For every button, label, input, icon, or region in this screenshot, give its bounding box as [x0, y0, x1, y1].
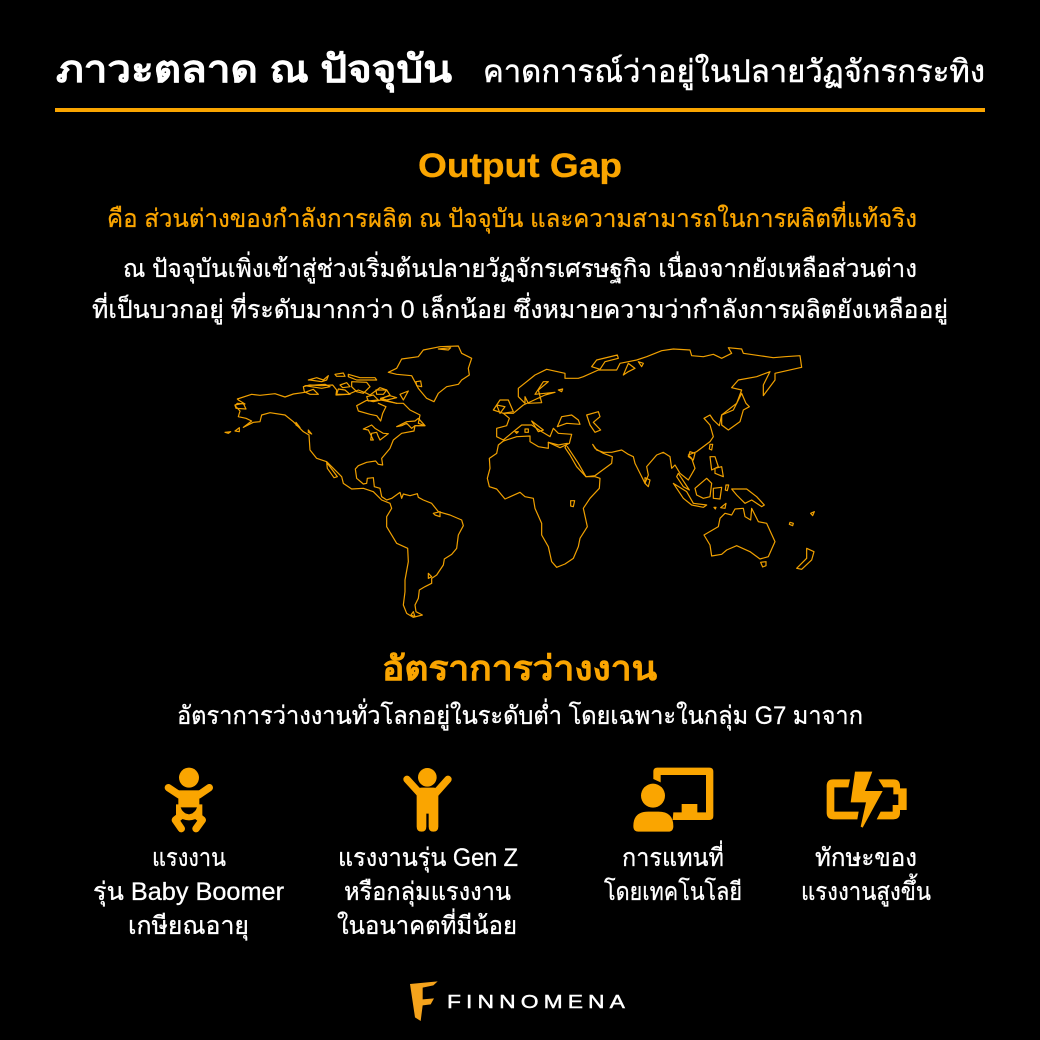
world map [225, 346, 814, 617]
label: หรือกลุ่มแรงงาน [344, 878, 511, 907]
logo [410, 981, 630, 1021]
map: Americas [225, 346, 472, 617]
item: gen z [337, 768, 518, 940]
unemployment subheading: อัตราการว่างงานทั่วโลกอยู่ในระดับต่ำ โดยเฉพาะในกลุ่ม G7 มาจาก [177, 698, 863, 731]
label: ในอนาคตที่มีน้อย [337, 908, 517, 940]
icon: logo mark [410, 981, 438, 1021]
header [56, 49, 985, 93]
label: รุ่น Baby Boomer [93, 878, 284, 907]
item: technology [604, 768, 742, 906]
label [801, 844, 931, 907]
subtitle: คาดการณ์ว่าอยู่ในปลายวัฏจักรกระทิง [483, 54, 985, 90]
label [604, 840, 742, 906]
label: ทักษะของ [815, 844, 917, 872]
heading: unemployment: อัตราการว่างงาน [382, 650, 657, 688]
label: โดยเทคโนโลยี [604, 877, 742, 906]
icon: child [407, 768, 448, 832]
label: เกษียณอายุ [128, 912, 249, 941]
label: แรงงานสูงขึ้น [801, 873, 931, 907]
icon: baby [168, 768, 209, 829]
label [337, 844, 518, 940]
icon: charging battery [827, 772, 907, 828]
label: แรงงาน [152, 844, 226, 872]
label: การแทนที่ [622, 840, 724, 872]
item: baby boomer [93, 768, 284, 941]
item: skills [801, 772, 931, 907]
label [93, 844, 284, 941]
wordmark: FINNOMENA [447, 992, 630, 1012]
body text: ที่เป็นบวกอยู่ ที่ระดับมากกว่า 0 เล็กน้อย ซึ่งหมายความว่ากำลังการผลิตยังเหลืออยู่ [92, 292, 948, 325]
map: Europe, Africa, Asia, Oceania [487, 348, 814, 569]
title: ภาวะตลาด ณ ปัจจุบัน [56, 49, 452, 93]
heading: Output Gap: Output Gap [418, 147, 622, 185]
label: แรงงานรุ่น Gen Z [338, 844, 518, 873]
body text: ณ ปัจจุบันเพิ่งเข้าสู่ช่วงเริ่มต้นปลายวัฏจักรเศรษฐกิจ เนื่องจากยังเหลือส่วนต่าง [123, 251, 917, 284]
definition: คือ ส่วนต่างของกำลังการผลิต ณ ปัจจุบัน และความสามารถในการผลิตที่แท้จริง [107, 201, 917, 234]
icon: presenter board [633, 768, 713, 832]
body text [92, 251, 948, 325]
